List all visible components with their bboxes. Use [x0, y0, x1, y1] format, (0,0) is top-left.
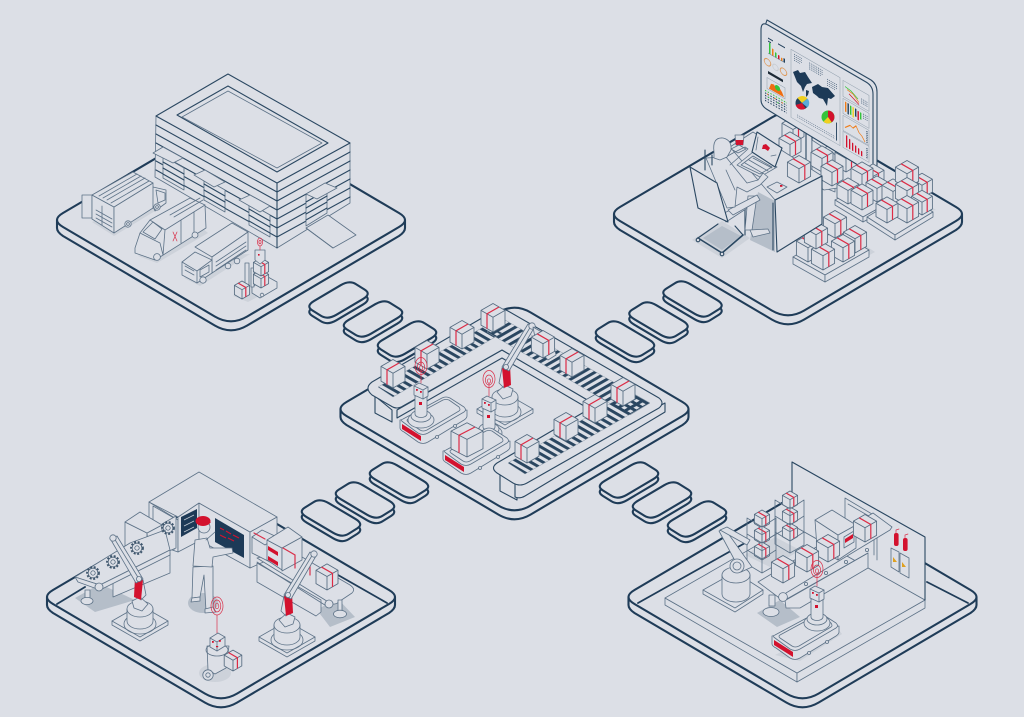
boxes on conveyor [771, 514, 877, 583]
platform [57, 119, 405, 330]
connector pills: bottom-right [600, 462, 726, 542]
shelving racks [745, 491, 804, 573]
chair and operator [690, 138, 770, 258]
wall screen dashboard [761, 20, 877, 174]
flatbed truck [182, 223, 250, 286]
box and tablet on desk [767, 155, 811, 193]
rim inner lines [57, 575, 387, 604]
robot arm [477, 323, 556, 429]
back pallets and shelves [775, 117, 858, 192]
robot arm [703, 527, 763, 612]
desk [730, 132, 822, 252]
rim inner lines [638, 543, 968, 603]
AGV with robot [772, 560, 842, 661]
floor shadows [75, 584, 355, 682]
conveyor belts [378, 320, 650, 474]
service robot with box [203, 633, 242, 680]
pie charts [796, 96, 808, 110]
worker [191, 516, 233, 613]
AGV with large box [443, 423, 510, 474]
connector pills: bottom-left [302, 462, 428, 541]
loading doors [163, 156, 184, 190]
right pallets [835, 160, 936, 240]
platform [340, 308, 688, 519]
world map [793, 70, 812, 92]
ramp [306, 215, 356, 248]
platform [614, 113, 962, 324]
panel: packing station with wall (bottom right) [628, 462, 976, 707]
inspection machine [815, 510, 856, 560]
platform [47, 496, 395, 707]
control booth [149, 472, 277, 568]
panel: warehouse and trucks (top left) [57, 74, 405, 330]
laptop [737, 132, 782, 177]
robot at centre [476, 370, 502, 441]
delivery van [135, 198, 208, 263]
fire extinguishers and panels [891, 529, 909, 578]
panel: conveyor loop with robots (centre) [340, 304, 688, 519]
gears [87, 522, 174, 579]
forklift robot [233, 238, 278, 302]
connector pills: top-right [596, 281, 722, 362]
box on arm gripper [531, 330, 555, 358]
left robot arm [110, 535, 168, 641]
right robot arm [259, 551, 317, 657]
panel: production line with worker (bottom left) [47, 472, 395, 707]
panel: control room and pallets (top right) [614, 20, 962, 324]
boxes on belt [381, 304, 635, 463]
raised floor [665, 525, 925, 682]
cup and note [731, 135, 746, 153]
connector pills: top-left [309, 282, 436, 362]
conveyor legs and sides [375, 350, 665, 500]
box truck [82, 172, 166, 236]
front pallet [793, 210, 875, 282]
wifi signal on worker [211, 597, 223, 633]
left machine and conveyor [75, 512, 176, 605]
building [153, 74, 356, 248]
awnings [153, 147, 183, 163]
wall with door [792, 462, 925, 600]
packing conveyor [757, 513, 892, 627]
AGV with robot [400, 358, 467, 444]
right machines and conveyor [252, 527, 354, 618]
dashboard charts [764, 34, 869, 162]
platform [628, 496, 976, 707]
conveyor frame [368, 309, 662, 485]
